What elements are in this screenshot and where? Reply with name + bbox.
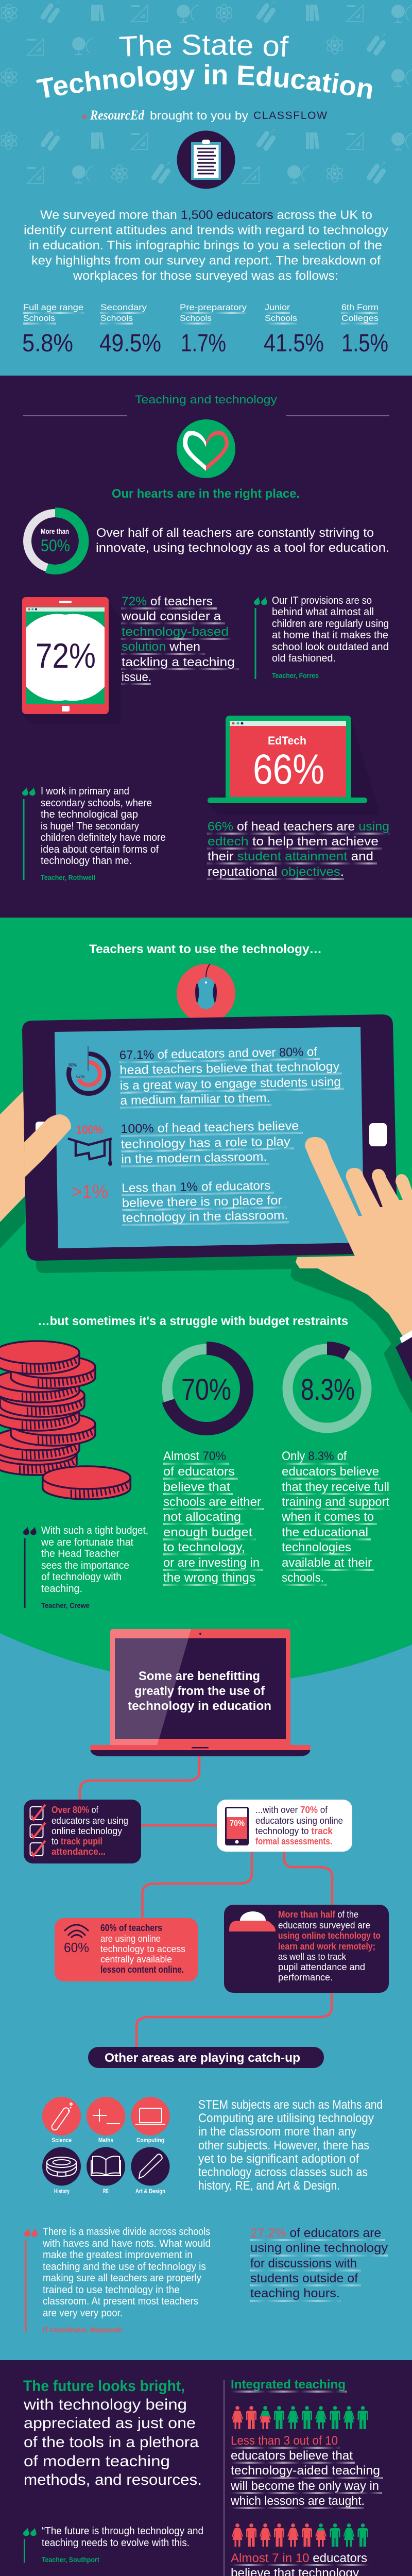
donut chart: more than 50%: 50% [41,536,70,555]
donut chart: 70% [162,1342,253,1435]
text: STEM subjects: Computing are utilising technology [198,2111,374,2125]
text: future looks bright: of the tools in a plethora [24,2434,199,2451]
heading: budget restraints: …but sometimes it's a struggle with budget restraints [38,1314,348,1328]
icon: tablet 72% [22,597,121,724]
icon: heart [177,419,235,478]
tablet text: 67.1% of educators and over 80% of [119,1045,317,1062]
subheading: our hearts: Our hearts are in the right place. [112,487,300,501]
quote: Forres teacher: children are regularly using [272,618,389,630]
callout: track formal assessments: 70% [230,1819,245,1828]
callout: learn and work remotely: as well as to track [278,1952,347,1962]
quote: IT coordinator: with haves and have nots. What would [42,2238,211,2249]
intro text: We surveyed more than 1,500 educators across the UK to [40,208,372,222]
quote: Rothwell teacher: is huge! The secondary [41,821,139,832]
quote: IT coordinator: IT Coordinator, Weymouth [43,2326,123,2334]
text: STEM subjects [198,2098,383,2193]
stat: pre-preparatory schools: Pre-preparatory [180,302,247,312]
callout: track pupil attendance: Over 80% of [52,1805,99,1815]
donut chart: 80% and 67%: 67% [76,1074,84,1079]
text: 66% of head teachers: 66% of head teachers are using [208,820,389,834]
text: future looks bright: methods, and resources. [24,2471,202,2488]
quote: IT coordinator: are very very poor. [43,2308,123,2319]
quote: Southport teacher: “The future is through technology and [42,2526,203,2537]
text: STEM subjects: in the classroom more than any [198,2125,356,2139]
text: less than 3 out of 10: Less than 3 out of 10 [231,2434,338,2448]
tablet text: is a great way to engage students using [120,1075,341,1093]
text: STEM subjects: yet to be significant adoption of [198,2152,359,2166]
brought to you by line: CLASSFLOW [253,110,327,122]
stat: full age range schools: Schools [23,313,55,323]
donut chart: more than 50% [27,507,89,574]
heading pill: other areas: Other areas are playing catch-up [105,2051,300,2065]
text: less than 3 out of 10 [230,2434,383,2508]
heading pill: other areas [88,2047,324,2068]
text: only 8.3% of educators: that they receive full [282,1480,389,1494]
stat: pre-preparatory schools: Schools [180,313,212,323]
callout: learn and work remotely: performance. [278,1972,333,1982]
quote: Forres teacher: Our IT provisions are so [272,595,372,606]
tablet text [119,1044,347,1225]
panel: benefiting from technology [0,1629,412,2360]
icon: laptop heading: greatly from the use of [134,1684,265,1698]
text: only 8.3% of educators: available at their [282,1556,372,1570]
donut chart: 8.3% [287,1342,367,1428]
callout: track formal assessments: technology to track [255,1826,333,1836]
text: STEM subjects: STEM subjects are such as Maths and [198,2098,383,2112]
connector lines [80,1754,332,2048]
icon: laptop EdTech 66% [208,716,379,815]
text: only 8.3% of educators: training and support [282,1495,389,1509]
title: The State of [119,35,289,57]
text: 66% of head teachers: reputational objectives . [208,865,344,879]
quote: IT coordinator: teaching and the use of technology is [43,2261,206,2273]
stat: 6th form colleges: 6th Form [341,302,379,312]
icon: art and design pencil: Art & Design [135,2188,165,2195]
icon: science [42,2097,81,2144]
quote: Forres teacher: Teacher, Forres [272,671,319,680]
icon: maths [87,2097,125,2144]
icon: computing: Computing [136,2137,164,2144]
icon: graduation cap 100%: 100% [76,1123,103,1137]
text: only 8.3% of educators: technologies [282,1540,351,1554]
shadows of tablet and hand [0,1196,412,1413]
panel: header [1,1,412,357]
donut chart: more than 50%: More than [41,527,69,535]
icon: art and design pencil [131,2147,170,2195]
brought to you by line: brought to you by [150,109,249,122]
background pattern icons [0,1,412,185]
heading: teaching and technology: Teaching and technology [135,393,277,406]
panel: teaching and technology [0,376,412,918]
icon: laptop EdTech 66%: 66% [253,746,324,793]
quote: Forres teacher [254,595,389,680]
quote: Crewe teacher: teaching. [41,1583,82,1595]
text: almost 70% of educators: Almost 70% [163,1449,226,1463]
stat: 6th form colleges [341,302,388,357]
text: only 8.3% of educators: the educational [282,1526,368,1539]
brought to you by line: ResourcEd [90,108,145,123]
callout: track pupil attendance: online technology [52,1826,122,1836]
quote: IT coordinator [24,2226,211,2334]
stat: full age range schools [22,302,84,357]
stat: secondary schools: Secondary [100,302,147,312]
heading: teachers want: Teachers want to use the technology… [89,942,322,956]
text: almost 7 in 10 [230,2551,370,2576]
text: only 8.3% of educators: schools. [282,1571,324,1585]
intro text [24,208,388,283]
title: Technology in Education [36,64,372,99]
icon: science: Science [52,2137,72,2144]
text: STEM subjects: history, RE, and Art & Design. [198,2179,340,2193]
icon: clipboard [177,131,235,189]
quote: Rothwell teacher [22,786,166,882]
stat: pre-preparatory schools [180,302,247,357]
text: almost 70% of educators: to technology, [163,1540,245,1554]
stat: full age range schools: Full age range [23,302,83,312]
callout: track formal assessments: educators using online [255,1816,343,1826]
title [36,35,372,99]
donut chart: 8.3%: 8.3% [301,1373,355,1406]
callout: 60% lesson content online: technology to access [100,1944,185,1954]
quote: Rothwell teacher: children definitely have more [41,832,166,843]
callout: track pupil attendance: educators are using [52,1816,128,1826]
left thumb [24,1114,71,1177]
callout: learn and work remotely: More than half of the [278,1909,358,1920]
quote: Rothwell teacher: the technological gap [41,809,138,820]
donut chart: 80% and 67% [68,1046,108,1093]
stat: secondary schools: Schools [100,313,133,323]
text: almost 70% of educators: or are investing in [163,1556,260,1570]
callout: 60% lesson content online [55,1918,198,1981]
quote: Forres teacher: behind what almost all [272,606,374,618]
quote: Rothwell teacher: idea about certain forms of [41,844,159,855]
quote: Crewe teacher: With such a tight budget, [41,1525,148,1536]
text: almost 70% of educators: the wrong things [163,1571,255,1585]
quote: IT coordinator: make the greatest improvement in [43,2249,193,2261]
text: only 8.3% of educators [281,1449,389,1585]
text: future looks bright [23,2378,202,2488]
quote: Crewe teacher [23,1525,148,1609]
stat: 6th form colleges: Colleges [341,313,379,323]
quote: Forres teacher: at home that it makes the [272,630,388,641]
text: future looks bright: appreciated as just one [24,2415,196,2432]
donut chart: 80% and 67%: 80% [68,1063,77,1067]
tablet text: technology has a role to play [121,1134,290,1151]
quote: Southport teacher: teaching needs to evolve with this. [42,2537,190,2549]
text: 72% of teachers [121,595,238,684]
intro text: identify current attitudes and trends with regard to technology [24,224,388,237]
brought to you by line [81,108,327,123]
icon: laptop heading: Some are benefitting [139,1669,260,1683]
callout: learn and work remotely: using online technology to [278,1930,381,1941]
quote: Forres teacher: school look outdated and [272,641,389,653]
text: over half of teachers: Over half of all teachers are constantly striving to [96,526,374,540]
text: less than 3 out of 10: which lessons are taught. [230,2494,365,2508]
icon: history [42,2147,81,2195]
text: less than 3 out of 10: educators believe that [231,2449,353,2463]
quote: Crewe teacher: sees the importance [41,1560,129,1571]
pictogram: less than 3 out of 10 [232,2406,368,2429]
text: future looks bright: The future looks bright, [23,2378,185,2395]
text: 72% of teachers: tackling a teaching [122,655,235,669]
quote: IT coordinator: making sure all teachers are properly [43,2273,201,2284]
icon: computing [131,2097,170,2144]
icon: coin stack [0,1341,130,1499]
text: almost 70% of educators: schools are either [163,1495,261,1509]
text: 72% of teachers: issue. [122,670,151,684]
quote: Rothwell teacher: secondary schools, where [41,798,152,809]
stat: junior schools: Schools [265,313,297,323]
donut chart: 70%: 70% [181,1373,231,1406]
text: 72% of teachers: solution when [122,640,200,654]
text: STEM subjects: other subjects. However, there has [198,2139,369,2153]
panel: teachers want to use technology [0,918,412,1711]
quote: IT coordinator: classroom. At present most teachers [43,2296,198,2307]
tablet [22,1014,398,1261]
callout: track pupil attendance: to track pupil [52,1836,102,1846]
stat: secondary schools: 49.5% [99,330,161,357]
left arm [0,1091,36,1222]
right hand [296,1137,412,1340]
icon: RE book: RE [103,2188,109,2195]
quote: Rothwell teacher: I work in primary and [41,786,129,797]
text: 72% of teachers: 72% of teachers [122,595,213,608]
stat: full age range schools: 5.8% [22,330,73,357]
tablet text: head teachers believe that technology [119,1060,340,1077]
text: 27.2% of educators: students outside of [250,2272,358,2285]
text: 66% of head teachers: edtech to help them achieve [208,835,379,849]
stat: pre-preparatory schools: 1.7% [181,330,226,357]
text: over half of teachers [96,526,389,555]
text: almost 70% of educators: enough budget [163,1526,252,1539]
text: 66% of head teachers [208,820,390,879]
icon: graduation cap 100% [68,1123,112,1166]
text: future looks bright: of modern teaching [24,2453,170,2470]
quote: Southport teacher: Teacher, Southport [42,2555,99,2564]
icon: history: History [54,2188,70,2195]
text: almost 70% of educators: of educators [163,1465,235,1479]
callout: track formal assessments: ...with over 70% of [255,1805,328,1815]
quote: Rothwell teacher: technology than me. [41,855,132,867]
stat: 6th form colleges: 1.5% [341,330,388,357]
icon: laptop EdTech 66%: EdTech [268,734,306,747]
brought to you by line: + [81,111,88,123]
icon: laptop heading [91,1629,310,1756]
text: 27.2% of educators: teaching hours. [250,2286,340,2300]
text: 72% of teachers: would consider a [121,609,221,623]
tablet text: technology in the classroom. [122,1208,288,1225]
callout: learn and work remotely [224,1905,389,1993]
tablet text: 100% of head teachers believe [121,1119,299,1136]
callout: track formal assessments: formal assessments. [255,1836,332,1846]
callout: learn and work remotely: learn and work remotely; [278,1941,375,1952]
icon: RE book [87,2147,125,2195]
icon: computer mouse [177,964,235,1023]
pictogram: almost 7 in 10 [232,2523,368,2547]
text: 66% of head teachers: their student attainment and [208,850,373,863]
intro text: workplaces for those surveyed was as follows: [73,269,338,283]
text: over half of teachers: innovate, using technology as a tool for education. [96,541,389,555]
text: almost 7 in 10: Almost 7 in 10 educators [231,2551,367,2565]
callout: 60% lesson content online: centrally available [100,1954,172,1964]
callout: 60% lesson content online: 60% [64,1940,89,1955]
icon: tablet 72%: 72% [36,636,96,675]
text: future looks bright: with technology being [23,2396,187,2413]
quote: Crewe teacher: of technology with [41,1571,122,1583]
quote: Southport teacher [23,2526,203,2564]
icon: laptop heading: technology in education [128,1699,271,1713]
text: almost 70% of educators: believe that [163,1480,230,1494]
text: STEM subjects: technology across classes such as [198,2165,368,2179]
text: 72% of teachers: technology-based [122,625,229,639]
text: 27.2% of educators: 27.2% of educators are [250,2226,381,2240]
quote: Forres teacher: old fashioned. [272,653,336,664]
callout: track pupil attendance: attendance... [52,1846,106,1857]
stat: junior schools: 41.5% [264,330,324,357]
quote: IT coordinator: There is a massive divide across schools [43,2226,210,2238]
stat: less than 1%: >1% [72,1181,108,1202]
text: only 8.3% of educators: educators believe [282,1465,379,1479]
text: only 8.3% of educators: Only 8.3% of [282,1449,347,1463]
suit cuff [396,1334,412,1382]
callout: learn and work remotely: educators surveyed are [278,1920,370,1930]
text: 27.2% of educators: for discussions with [250,2257,357,2270]
quote: Crewe teacher: the Head Teacher [41,1548,119,1560]
callout: track pupil attendance [24,1800,141,1863]
callout: 60% lesson content online: lesson content online. [100,1964,184,1975]
tablet text: believe there is no place for [122,1194,282,1210]
stat: secondary schools [99,302,161,357]
tablet text: a medium familiar to them. [120,1091,270,1108]
tablet text: Less than 1% of educators [122,1179,271,1195]
text: less than 3 out of 10: technology-aided teaching [231,2464,380,2478]
text: almost 70% of educators [163,1449,264,1585]
heading: integrated teaching: Integrated teaching [231,2378,346,2392]
intro text: key highlights from our survey and report. The breakdown of [31,253,381,268]
text: 27.2% of educators [250,2226,388,2301]
text: less than 3 out of 10: will become the only way in [230,2479,379,2493]
callout: track formal assessments [217,1800,352,1852]
icon: maths: Maths [98,2137,113,2144]
text: only 8.3% of educators: when it comes to [281,1510,374,1524]
quote: Rothwell teacher: Teacher, Rothwell [41,873,95,882]
panel: the future looks bright [0,2360,412,2576]
callout: 60% lesson content online: 60% of teachers [100,1923,162,1933]
text: 27.2% of educators: using online technology [250,2241,388,2255]
text: almost 70% of educators: not allocating [163,1510,241,1524]
intro text: in education. This infographic brings to you a selection of the [29,239,382,252]
tablet text: in the modern classroom. [121,1150,267,1166]
quote: IT coordinator: trained to use technology in the [43,2284,180,2296]
callout: learn and work remotely: pupil attendance and [278,1962,365,1972]
quote: Crewe teacher: we are fortunate that [41,1537,133,1548]
stat: junior schools: Junior [265,302,290,312]
callout: 60% lesson content online: are using online [100,1934,161,1944]
quote: Crewe teacher: Teacher, Crewe [41,1601,90,1609]
stat: junior schools [264,302,324,357]
